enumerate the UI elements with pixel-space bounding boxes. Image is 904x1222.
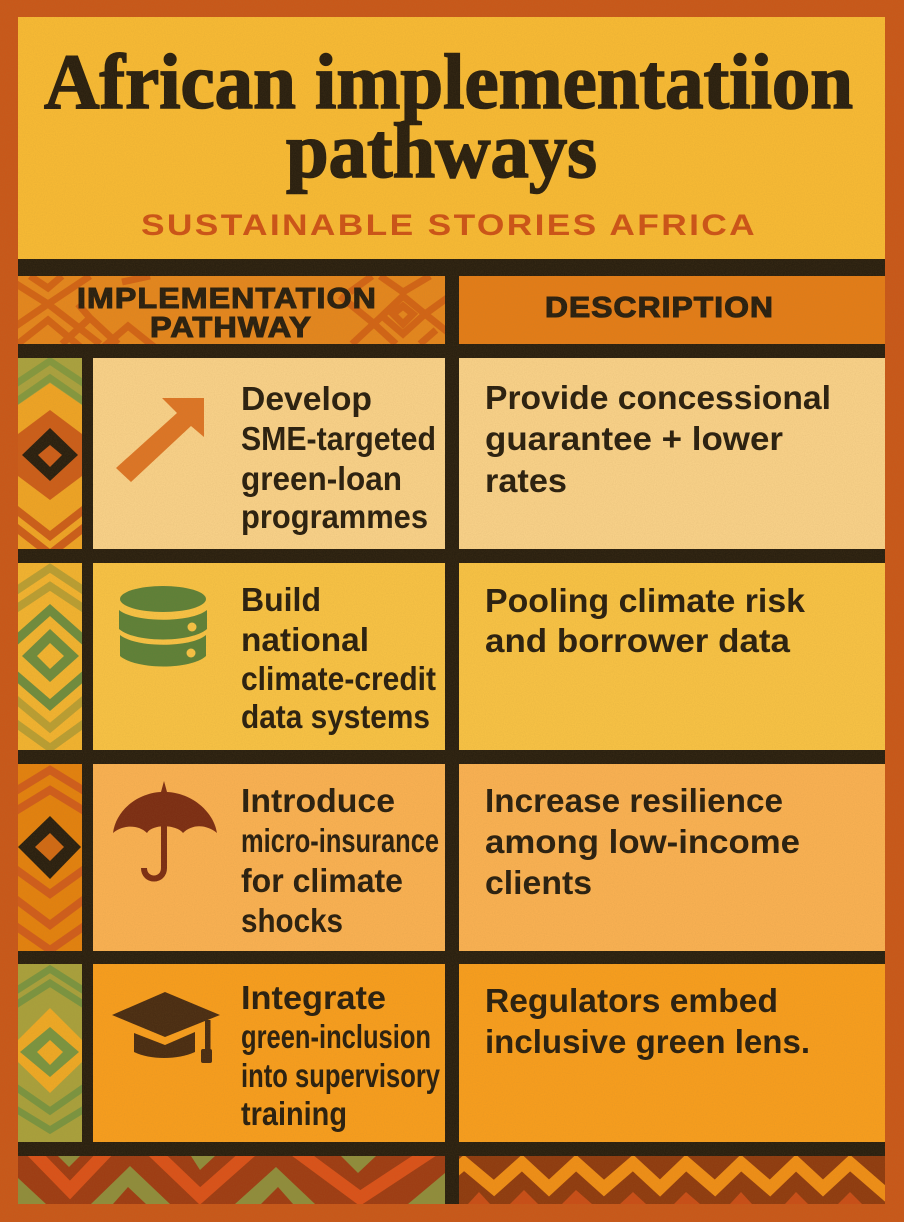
strip pattern row 1 xyxy=(18,358,82,549)
pathway text: Introduce xyxy=(241,782,395,819)
icon: arrow xyxy=(116,398,204,482)
title: pathways xyxy=(286,107,597,194)
pathway text xyxy=(241,380,436,535)
description text: and borrower data xyxy=(485,622,791,659)
row 3: micro-insurance xyxy=(93,764,445,951)
pathway text: training xyxy=(241,1095,347,1132)
description text: Regulators embed xyxy=(485,982,778,1019)
icon: graduation cap xyxy=(112,992,220,1063)
column heading text: IMPLEMENTATION xyxy=(77,283,377,315)
title xyxy=(44,38,853,194)
pathway text: national xyxy=(241,621,369,658)
pathway text xyxy=(241,782,439,939)
pathway text xyxy=(241,581,436,735)
pathway text xyxy=(241,979,441,1132)
panel: column header implementation pathway xyxy=(18,276,445,344)
column heading text: PATHWAY xyxy=(150,312,312,344)
strip pattern row 2 xyxy=(18,563,82,750)
row 2: description xyxy=(459,563,885,750)
pathway text: green-loan xyxy=(241,460,402,497)
column heading text: DESCRIPTION xyxy=(545,292,774,324)
pathway text: for climate xyxy=(241,862,403,899)
description text xyxy=(485,582,806,659)
row 2: climate credit data xyxy=(93,563,445,750)
pathway text: data systems xyxy=(241,698,430,735)
pathway text: micro-insurance xyxy=(241,822,439,859)
column heading text xyxy=(77,283,377,344)
pathway text: programmes xyxy=(241,498,428,535)
panel: column header description xyxy=(459,276,885,344)
description text: inclusive green lens. xyxy=(485,1023,810,1060)
pathway text: into supervisory xyxy=(241,1057,441,1094)
pathway text: Build xyxy=(241,581,321,618)
title: African implementatiion xyxy=(44,38,853,125)
strip pattern row 3 xyxy=(18,764,82,951)
icon: umbrella xyxy=(113,781,217,878)
pathway text: shocks xyxy=(241,902,343,939)
panel: title header xyxy=(18,17,885,259)
row 3: description xyxy=(459,764,885,951)
description text xyxy=(485,982,810,1060)
description text: among low-income xyxy=(485,823,800,860)
bottom pattern right xyxy=(450,1156,895,1204)
pathway text: SME-targeted xyxy=(241,420,436,457)
row 1: develop green loans xyxy=(93,358,445,549)
subtitle: SUSTAINABLE STORIES AFRICA xyxy=(141,209,757,242)
description text: clients xyxy=(485,864,592,901)
table grid frame xyxy=(18,259,885,1204)
row 4: description xyxy=(459,964,885,1142)
description text: Increase resilience xyxy=(485,782,783,819)
bottom pattern left xyxy=(18,1156,445,1204)
pathway text: green-inclusion xyxy=(241,1018,431,1055)
description text xyxy=(485,782,800,901)
description text: rates xyxy=(485,462,567,499)
pathway text: climate-credit xyxy=(241,660,436,697)
pathway text: Integrate xyxy=(241,979,386,1016)
row 4: supervisory training xyxy=(93,964,445,1142)
icon: database xyxy=(119,586,207,666)
description text: Pooling climate risk xyxy=(485,582,806,619)
pathway text: Develop xyxy=(241,380,372,417)
description text: guarantee + lower xyxy=(485,420,783,457)
row 1: description xyxy=(459,358,885,549)
description text: Provide concessional xyxy=(485,379,831,416)
description text xyxy=(485,379,831,499)
strip pattern row 4 xyxy=(18,964,82,1142)
